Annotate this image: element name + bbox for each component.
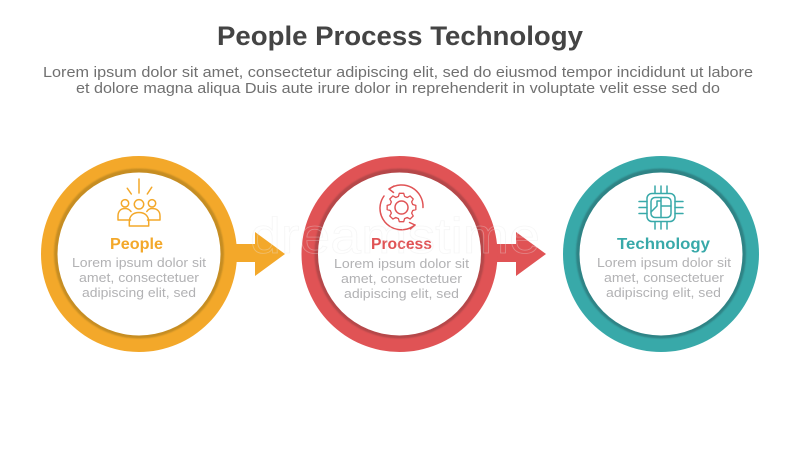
body text: people: adipiscing elit, sed (82, 286, 196, 300)
ring: people (41, 156, 237, 352)
panel: process (302, 156, 546, 352)
heading: process: Process (371, 236, 432, 253)
body text: technology (597, 256, 732, 300)
subtitle text: Lorem ipsum dolor sit amet, consectetur adipiscing elit, sed do eiusmod tempor incididunt ut labore (43, 65, 753, 81)
ring: process (302, 156, 498, 352)
watermark: dreamstime (250, 208, 540, 264)
panel: people (41, 156, 285, 352)
body text: process: amet, consectetuer (341, 272, 462, 286)
heading: technology: Technology (617, 236, 710, 253)
body text: people: amet, consectetuer (79, 271, 199, 285)
ring: technology (563, 156, 759, 352)
arrow: process to technology (491, 232, 546, 276)
body text: people (72, 256, 207, 300)
subtitle text (43, 65, 753, 97)
body text: process: Lorem ipsum dolor sit (334, 257, 470, 271)
heading: people: People (110, 236, 163, 253)
icon: people group (118, 179, 160, 226)
icon: gear with cycle arrows (380, 185, 423, 230)
title: People Process Technology (217, 21, 583, 51)
subtitle text: et dolore magna aliqua Duis aute irure dolor in reprehenderit in voluptate velit esse sed do (76, 81, 720, 97)
body text: technology: amet, consectetuer (604, 271, 724, 285)
body text: process: adipiscing elit, sed (344, 287, 459, 301)
panel: technology (563, 156, 759, 352)
body text: people: Lorem ipsum dolor sit (72, 256, 207, 270)
body text: technology: adipiscing elit, sed (606, 286, 721, 300)
body text: technology: Lorem ipsum dolor sit (597, 256, 732, 270)
icon: microchip (639, 186, 683, 229)
body text: process (334, 257, 470, 301)
arrow: people to process (230, 232, 285, 276)
